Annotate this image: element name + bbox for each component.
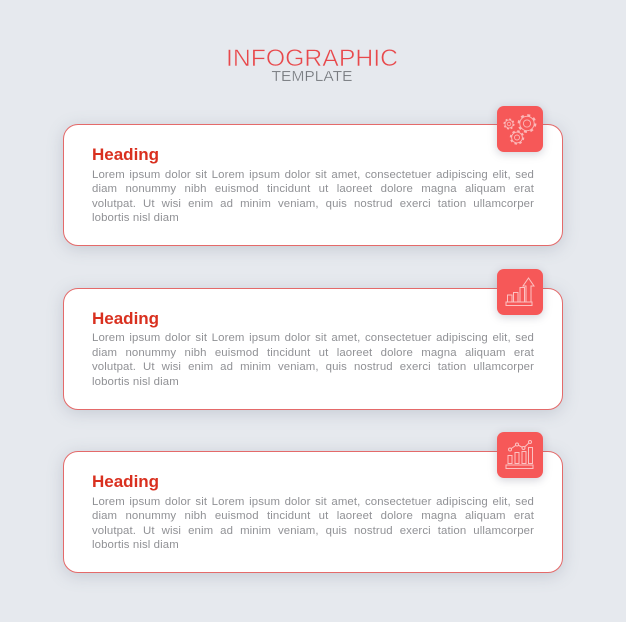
text block 1: lobortis nisl diam [92,212,179,224]
text block 1: Lorem ipsum dolor sit Lorem ipsum dolor sit amet, consectetuer adipiscing elit, sed [92,168,534,180]
text block 2: Lorem ipsum dolor sit Lorem ipsum dolor sit amet, consectetuer adipiscing elit, sed [92,332,534,344]
icon: rising bars with arrow [497,268,543,314]
panel: card 3 [63,451,563,573]
text block 3 [92,496,534,551]
text block 1 [92,168,534,224]
heading 1: Heading [92,145,159,164]
text block 3: Lorem ipsum dolor sit Lorem ipsum dolor sit amet, consectetuer adipiscing elit, sed [92,496,534,508]
title [226,45,398,85]
text block 2 [92,332,534,388]
text block 3: lobortis nisl diam [92,539,179,551]
panel: card 2 [63,288,563,410]
icon: gears [497,106,543,152]
heading 2: Heading [92,308,159,328]
panel: card 1 [63,124,563,246]
title: TEMPLATE [272,69,353,85]
text block 3: diam nonummy nibh euismod tincidunt ut laoreet dolore magna aliquam erat [92,510,534,522]
icon: bar chart with trend line [497,432,543,478]
title: INFOGRAPHIC [226,45,398,72]
text block 1: diam nonummy nibh euismod tincidunt ut laoreet dolore magna aliquam erat [92,183,534,195]
text block 2: diam nonummy nibh euismod tincidunt ut laoreet dolore magna aliquam erat [92,347,534,359]
heading 3: Heading [92,472,159,491]
text block 2: lobortis nisl diam [92,376,179,388]
